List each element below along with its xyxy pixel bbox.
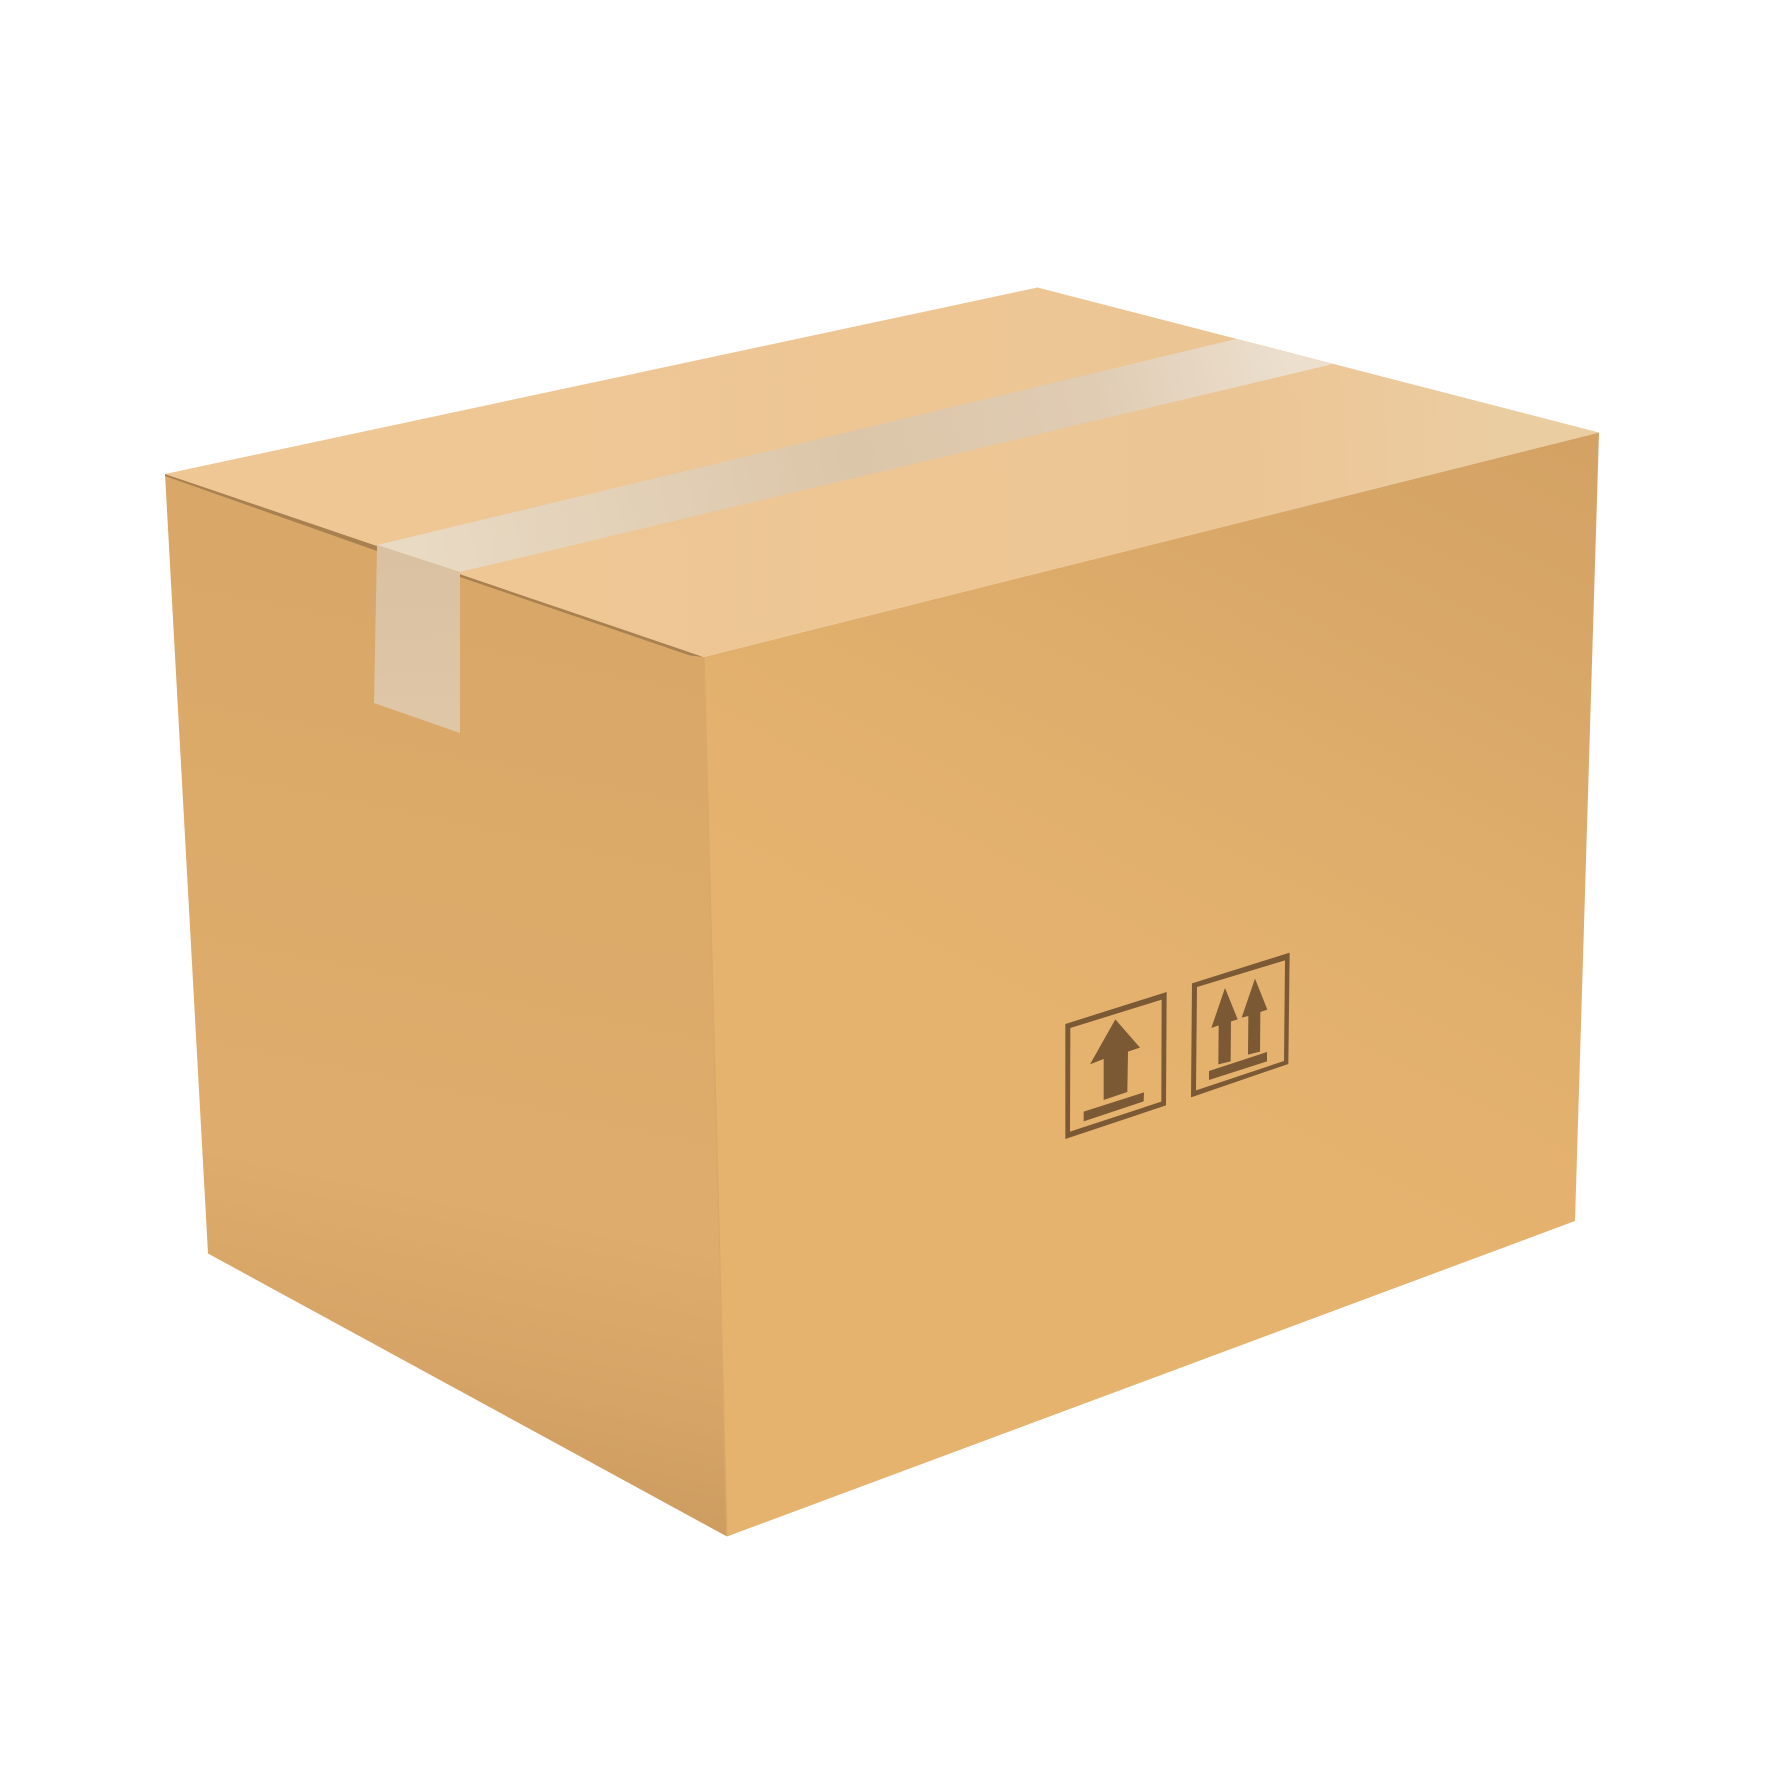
front face (704, 432, 1599, 1536)
top face (165, 288, 1599, 657)
left face (165, 474, 727, 1536)
handling icons (1065, 953, 1290, 1139)
packing tape (374, 339, 1333, 733)
corner edge (704, 657, 727, 1536)
icon: this way up, double arrow (1191, 953, 1290, 1097)
tape: hanging flap (374, 545, 460, 733)
icon: this way up, single arrow (1065, 992, 1167, 1139)
tape: top strip (377, 339, 1333, 572)
shadow under top face edge (165, 474, 704, 657)
